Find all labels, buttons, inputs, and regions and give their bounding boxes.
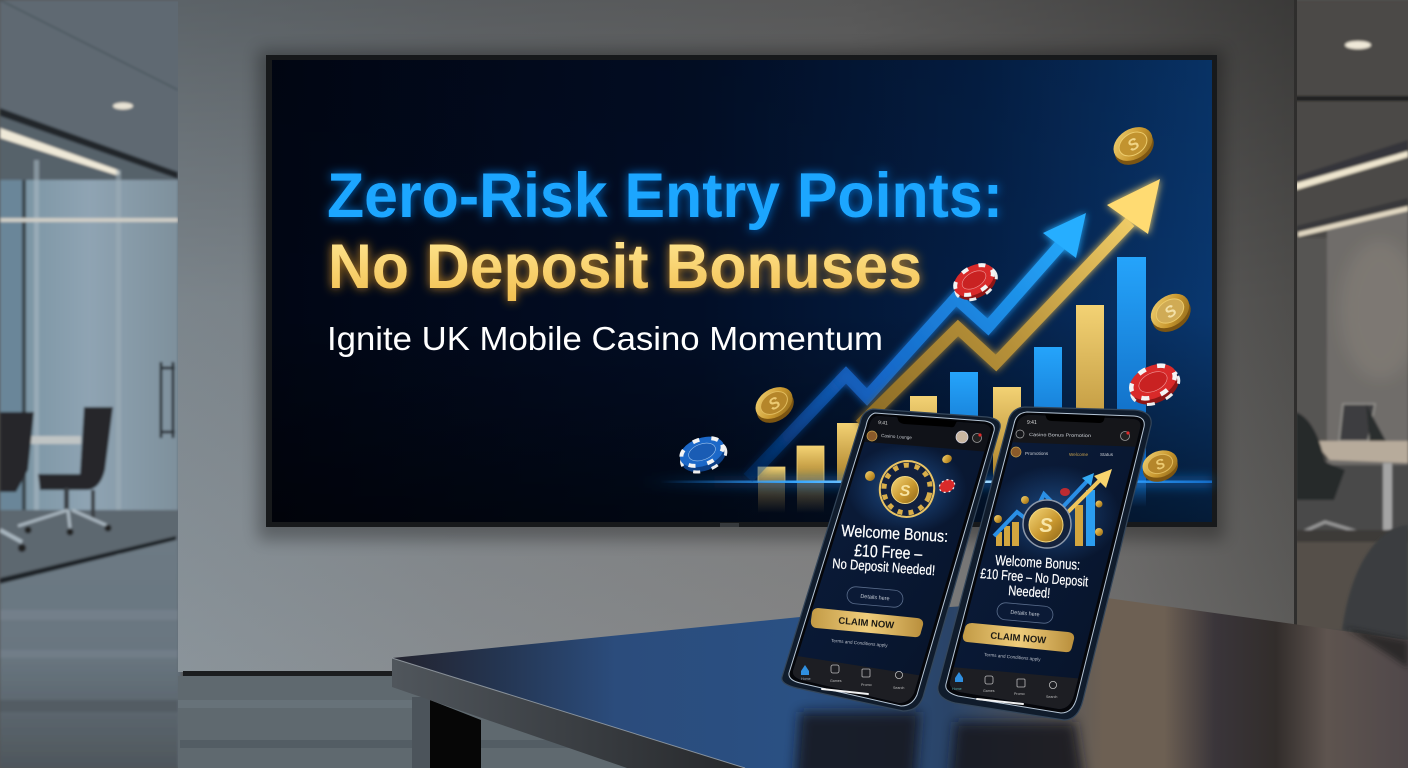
pill: Details here <box>1010 610 1040 618</box>
header labels: Casino Bonus Promotion <box>1029 432 1092 438</box>
mini growth chart <box>990 465 1120 565</box>
coin: left: S <box>766 394 784 414</box>
bottom nav: Home <box>952 687 962 691</box>
header bar <box>864 416 990 452</box>
mini growth chart: S <box>1039 515 1053 537</box>
wall-mounted display <box>258 50 1224 540</box>
coin: behind phone: S <box>1153 455 1168 473</box>
arrow: blue trend line <box>748 213 1086 478</box>
offer headline: Needed! <box>1008 582 1051 601</box>
notch <box>1045 414 1105 423</box>
bottom nav: Games <box>830 679 842 683</box>
chip: blue <box>676 431 730 478</box>
pill <box>846 586 904 608</box>
header labels: 9:41 <box>878 420 888 427</box>
button: claim now <box>811 608 923 637</box>
header labels: Status <box>1100 452 1114 457</box>
notch <box>897 416 957 427</box>
coin: right <box>1143 287 1198 339</box>
icon: chip and coin: S <box>900 483 911 500</box>
phone: left <box>780 409 1000 712</box>
coin: top right <box>1106 120 1161 172</box>
bottom nav: Promo <box>861 683 872 687</box>
pill: Details here <box>860 594 890 602</box>
floor in front of wall <box>178 676 820 768</box>
coin: top right: S <box>1125 135 1143 155</box>
right office room <box>1290 0 1408 650</box>
bottom nav <box>950 668 1078 709</box>
title: Zero-Risk Entry Points: Zero-Risk Entry Points: <box>327 161 1003 231</box>
header labels <box>1011 420 1130 457</box>
arrow: gold trend line <box>860 179 1160 425</box>
left office room <box>0 0 182 768</box>
header labels: Casino Lounge <box>881 433 913 440</box>
foreground chair <box>1342 525 1408 642</box>
bar chart <box>758 257 1146 513</box>
small print: Terms and Conditions apply <box>984 652 1042 662</box>
phone: right <box>935 407 1151 720</box>
pill <box>996 602 1054 624</box>
header labels <box>867 420 982 443</box>
offer headline: Welcome Bonus: <box>841 522 949 546</box>
wall <box>178 0 1297 676</box>
coin: right: S <box>1162 302 1180 322</box>
bottom nav: Search <box>893 686 904 690</box>
subtitle: Ignite UK Mobile Casino Momentum <box>327 320 883 357</box>
offer headline: £10 Free – No Deposit <box>980 565 1089 589</box>
phone reflections on table <box>795 712 1084 768</box>
horizon light line <box>640 476 1212 488</box>
bottom nav: Home <box>801 677 811 681</box>
title: No Deposit Bonuses: No Deposit Bonuses <box>328 232 922 302</box>
small print: Terms and Conditions apply <box>831 638 889 648</box>
chip: red upper <box>948 257 1002 307</box>
header labels: 9:41 <box>1027 420 1037 426</box>
offer headline <box>832 522 949 578</box>
bottom nav: Games <box>983 689 995 693</box>
bottom nav <box>793 656 919 703</box>
header bar <box>1012 415 1140 447</box>
offer headline: No Deposit Needed! <box>832 555 936 578</box>
table <box>392 597 1408 768</box>
bottom nav: Search <box>1046 695 1057 699</box>
header labels: Welcome <box>1069 452 1089 457</box>
coin: left <box>749 381 800 429</box>
button: claim now: CLAIM NOW <box>990 631 1047 646</box>
button: claim now: CLAIM NOW <box>838 616 895 631</box>
offer headline: Welcome Bonus: <box>995 553 1081 574</box>
coin: behind phone <box>1138 446 1183 486</box>
header labels: Promotions <box>1025 451 1049 456</box>
chip: red lower <box>1124 357 1185 412</box>
icon: chip and coin <box>847 444 967 534</box>
button: claim now <box>963 623 1074 652</box>
bottom nav: Promo <box>1014 692 1025 696</box>
offer headline: £10 Free – <box>854 541 923 564</box>
offer headline <box>980 553 1089 601</box>
